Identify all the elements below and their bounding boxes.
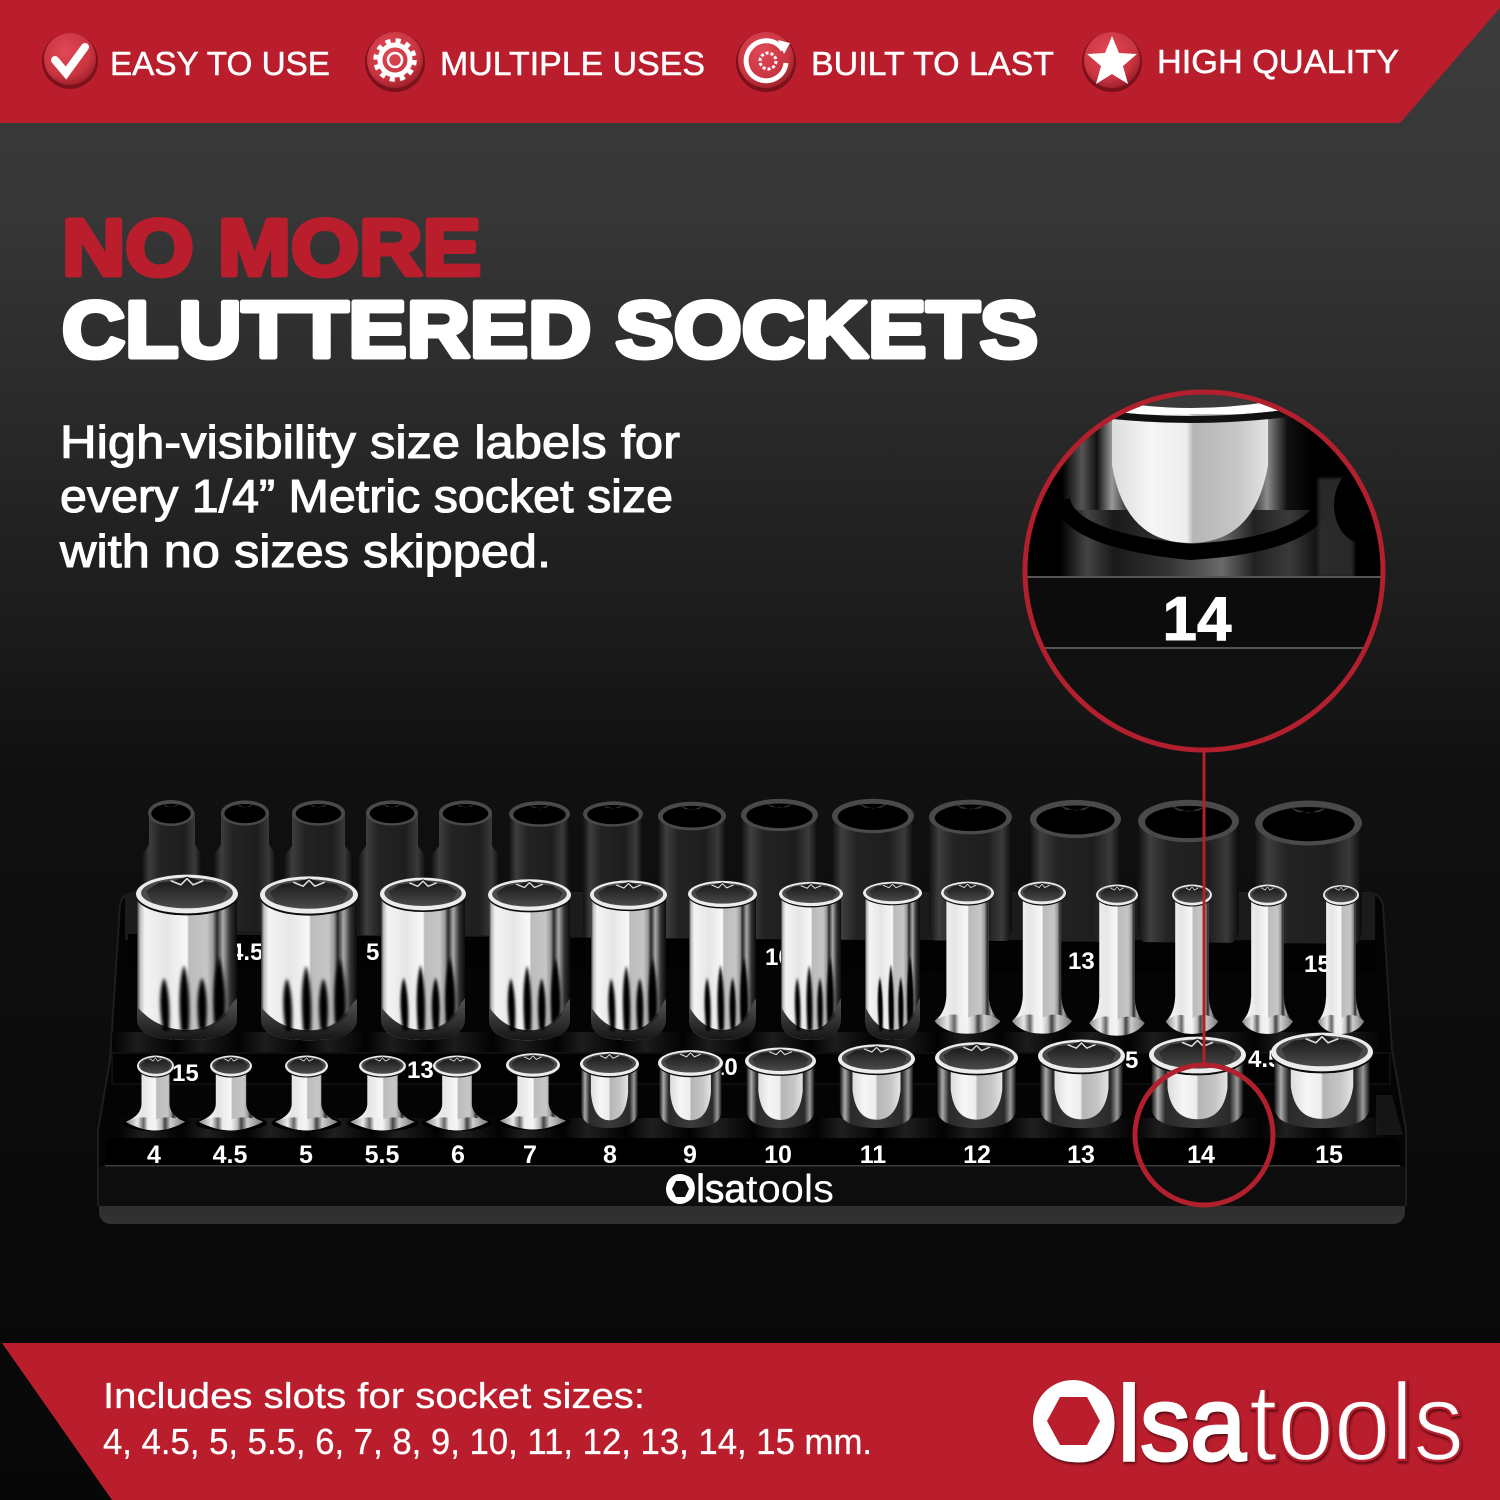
front label strip <box>105 1138 1400 1166</box>
front size labels: 7 <box>523 1141 537 1169</box>
rear row labels: 15 <box>1304 951 1331 978</box>
feature: easy to use: EASY TO USE <box>110 45 330 82</box>
middle row labels: 5 <box>1125 1047 1138 1074</box>
magnified callout: 14 <box>1163 585 1232 654</box>
front size labels <box>147 1141 1343 1169</box>
feature: built to last: BUILT TO LAST <box>811 45 1054 82</box>
rear label strip <box>128 934 1375 973</box>
middle row labels: 13 <box>407 1057 434 1084</box>
front size labels: 5 <box>299 1141 313 1169</box>
front size labels: 15 <box>1315 1141 1343 1169</box>
description text: High-visibility size labels for <box>60 416 680 468</box>
rear row labels: 5 <box>366 939 379 966</box>
front size labels: 5.5 <box>365 1141 399 1169</box>
middle row labels: 15 <box>172 1060 199 1087</box>
description text: with no sizes skipped. <box>59 525 551 577</box>
bottom banner <box>2 1343 1500 1500</box>
front size labels: 10 <box>764 1141 792 1169</box>
front size labels: 4.5 <box>213 1141 247 1169</box>
included sizes text: 4, 4.5, 5, 5.5, 6, 7, 8, 9, 10, 11, 12, 13, 14, 15 mm. <box>103 1421 872 1462</box>
middle row labels: 10 <box>711 1054 738 1081</box>
highlight ellipse on size 14 <box>1135 1065 1273 1205</box>
front size labels: 12 <box>963 1141 991 1169</box>
brand logo: tools <box>1249 1361 1464 1484</box>
rear row black sockets <box>142 799 1362 948</box>
tray logo: tools <box>746 1168 834 1211</box>
feature: high quality <box>1082 32 1399 92</box>
callout leader line <box>1202 752 1206 1065</box>
rear row labels: 13 <box>1068 948 1095 975</box>
heading: CLUTTERED SOCKETS <box>62 285 1038 374</box>
feature: high quality: HIGH QUALITY <box>1157 43 1399 80</box>
front size labels: 4 <box>147 1141 161 1169</box>
front size labels: 6 <box>451 1141 465 1169</box>
brand logo <box>1033 1361 1464 1484</box>
description text <box>59 416 680 577</box>
front size labels: 8 <box>603 1141 617 1169</box>
socket organizer product <box>98 799 1406 1224</box>
magnified callout <box>1024 385 1390 759</box>
included sizes text: Includes slots for socket sizes: <box>103 1375 645 1416</box>
front size labels: 13 <box>1067 1141 1095 1169</box>
front size labels: 14 <box>1187 1141 1215 1169</box>
middle row chrome sockets <box>136 875 1364 1040</box>
middle row labels: 4.5 <box>1248 1046 1281 1073</box>
tray logo <box>666 1168 834 1211</box>
feature: easy to use <box>42 33 330 89</box>
rear row labels <box>230 939 1331 978</box>
brand logo: Olsa <box>1040 1365 1246 1483</box>
front size labels: 9 <box>683 1141 697 1169</box>
rear row labels: 10 <box>765 944 792 971</box>
description text: every 1/4” Metric socket size <box>60 470 673 522</box>
feature: built to last <box>736 32 1054 92</box>
front size labels: 11 <box>860 1141 886 1169</box>
tray body <box>98 893 1406 1224</box>
feature: multiple uses: MULTIPLE USES <box>440 45 705 82</box>
top banner <box>0 0 1500 123</box>
included sizes text <box>103 1375 872 1462</box>
front row chrome sockets <box>123 1033 1373 1131</box>
tray logo: Olsa <box>666 1168 746 1211</box>
middle row labels <box>172 1046 1281 1087</box>
heading: NO MORE <box>62 203 481 292</box>
feature: multiple uses <box>365 32 705 92</box>
rear row labels: 4.5 <box>230 939 263 966</box>
heading <box>62 203 1038 374</box>
middle tier strip <box>112 1053 1390 1084</box>
